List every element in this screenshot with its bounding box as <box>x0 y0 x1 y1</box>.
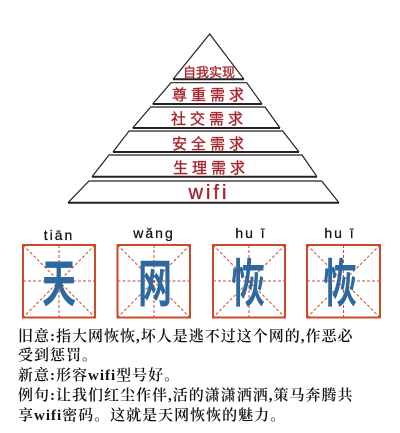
explanation text: 享wifi密码。这就是天网恢恢的魅力。 <box>18 406 286 424</box>
pyramid tier: social <box>133 107 280 128</box>
pyramid tier: safety <box>113 131 299 153</box>
pinyin: wǎng <box>132 225 175 241</box>
character: 网 <box>138 256 172 314</box>
grid <box>307 245 380 318</box>
character card: hui <box>307 225 380 318</box>
grid <box>23 245 95 318</box>
explanation text: 旧意:指大网恢恢,坏人是逃不过这个网的,作恶必 <box>18 327 354 345</box>
character: 恢 <box>231 256 265 314</box>
pyramid tier: esteem: 尊重需求 <box>172 87 248 104</box>
pyramid tier: esteem <box>153 83 262 104</box>
explanation text: 例句:让我们红尘作伴,活的潇潇洒洒,策马奔腾共 <box>18 386 354 404</box>
pyramid tier: social: 社交需求 <box>171 110 247 128</box>
character card: wang <box>118 225 190 318</box>
grid <box>118 245 190 318</box>
explanation text <box>18 327 354 424</box>
pyramid tier: self-actualization: 自我实现 <box>183 65 235 80</box>
grid <box>213 245 285 318</box>
character: 恢 <box>323 256 357 314</box>
pyramid tier: safety: 安全需求 <box>172 135 248 153</box>
pinyin: hu ī <box>235 225 267 241</box>
pyramid tier: physiological <box>92 155 317 177</box>
pinyin: hu ī <box>324 225 356 241</box>
character: 天 <box>42 256 76 314</box>
pyramid tier: self-actualization <box>173 34 244 80</box>
pinyin: tiān <box>44 227 74 243</box>
explanation text: 新意:形容wifi型号好。 <box>18 366 180 384</box>
explanation text: 受到惩罚。 <box>18 347 98 364</box>
character card: hui <box>213 225 285 318</box>
pyramid diagram <box>68 34 339 204</box>
pyramid tier: physiological: 生理需求 <box>173 160 249 177</box>
character card: tian <box>23 227 95 318</box>
pyramid tier: wifi: wifi <box>188 182 229 204</box>
pyramid tier: wifi <box>68 181 339 204</box>
